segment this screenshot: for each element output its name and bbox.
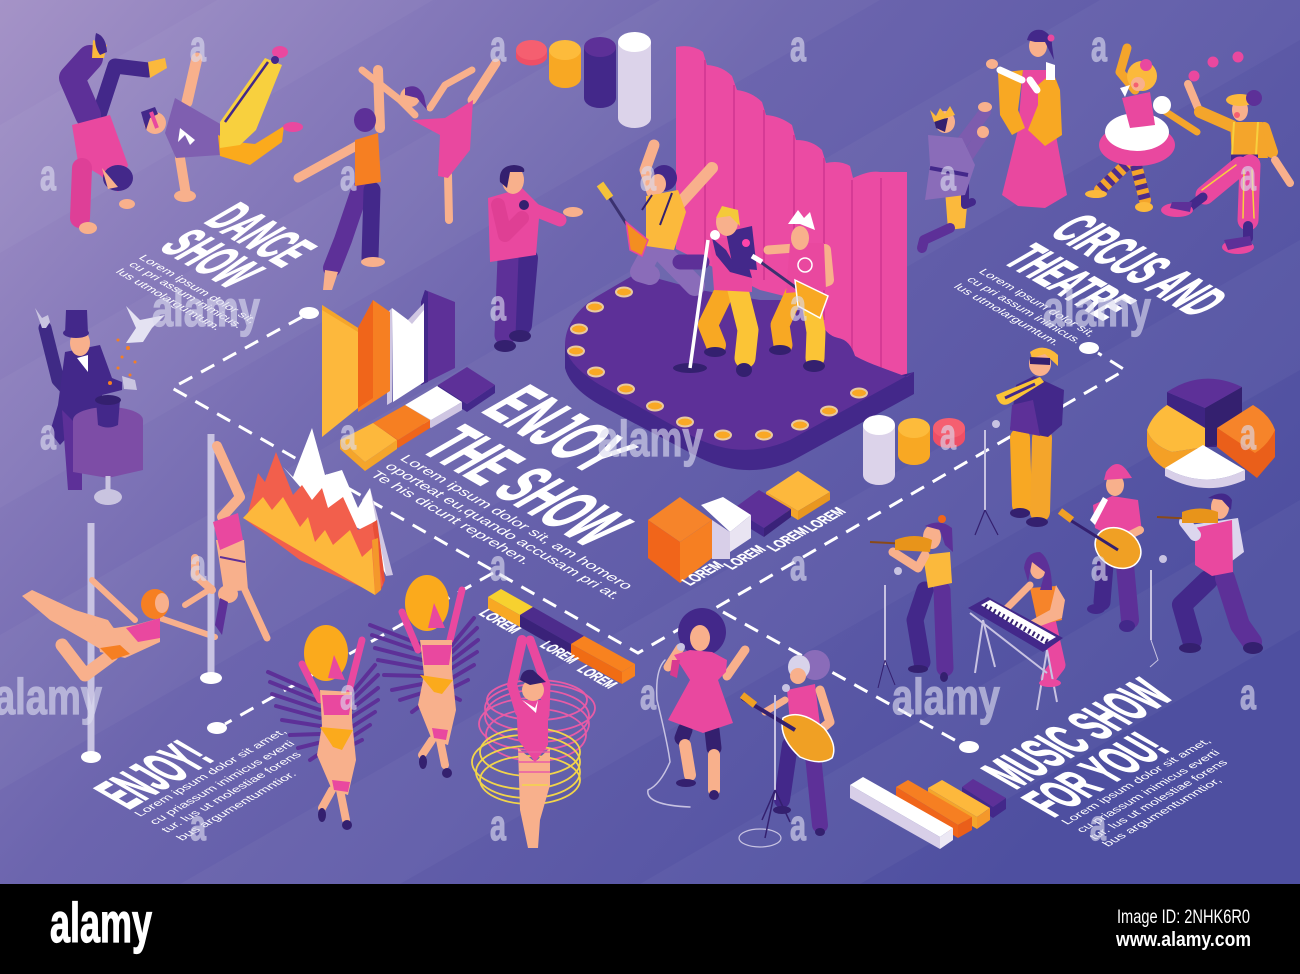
watermark marks: a <box>790 801 806 850</box>
labels: lorem bar: LOREM <box>573 663 620 691</box>
watermark marks: a <box>40 151 56 200</box>
clown with tutu <box>1085 48 1197 212</box>
text block: main lorem: Te his dicunt reprehen. <box>366 469 535 567</box>
breakdancer in pink hoodie <box>72 33 167 234</box>
heading: music show for you <box>968 670 1187 824</box>
dashed connector lines <box>172 317 1125 743</box>
labels: cube chart: LOREM <box>679 559 728 588</box>
watermark logos: alamy <box>598 411 703 467</box>
labels: lorem bar: LOREM <box>536 639 581 666</box>
text block: music show: Lorem ipsum dolor sit amet, <box>1059 737 1214 827</box>
watermark marks: a <box>490 541 506 590</box>
hula hoop dancer <box>472 640 595 848</box>
watermark marks: a <box>490 22 506 71</box>
woman singer in pink dress <box>648 608 745 807</box>
watermark marks: a <box>790 22 806 71</box>
watermark marks: a <box>790 281 806 330</box>
chart: top cylinders <box>516 32 651 128</box>
watermark marks: a <box>190 541 206 590</box>
title: enjoy the show <box>404 375 653 557</box>
labels: cube chart: LOREM <box>721 543 770 572</box>
labels: lorem bar <box>475 607 620 691</box>
labels: cube chart <box>679 505 850 588</box>
watermark marks: a <box>490 281 506 330</box>
footer bar: Image ID: 2NHK6R0 <box>1117 907 1250 928</box>
pole dancer two <box>185 434 267 684</box>
footer bar: alamy <box>50 891 152 954</box>
watermark marks: a <box>190 22 206 71</box>
cylinders: right of stage <box>863 415 965 485</box>
watermark marks: a <box>1240 151 1256 200</box>
band: singer with mic stand <box>673 206 757 377</box>
cubes: bottom center chart <box>648 471 830 583</box>
watermark marks: a <box>1091 541 1107 590</box>
connector dots <box>207 307 1099 753</box>
band: punk bass guitarist <box>752 210 828 372</box>
ballerina <box>362 63 496 220</box>
pole dancer one <box>22 523 215 763</box>
text block: dance show: cu pri assum inimicus. <box>125 260 246 330</box>
labels: cube chart: LOREM <box>764 525 813 554</box>
heading: music show for you: FOR YOU! <box>1009 724 1181 824</box>
male ballet dancer <box>298 70 385 290</box>
text block: music show: tur. lus ut molestiae forens <box>1087 758 1231 842</box>
keyboard player <box>968 552 1065 710</box>
footer bar: www.alamy.com <box>1115 929 1251 951</box>
watermark marks: a <box>1240 410 1256 459</box>
text block: music show: bus argumentumntior, <box>1100 776 1225 849</box>
text block: main lorem: oporteat eu,quando accusam pri at. <box>381 461 625 602</box>
watermark marks: a <box>640 151 656 200</box>
violinist man <box>1150 493 1263 667</box>
carnival dancer right <box>370 575 478 778</box>
watermark logos: alamy <box>152 281 260 337</box>
text block: enjoy: bus argumentumntior. <box>174 770 300 843</box>
magician with top hat and table <box>35 306 165 505</box>
text block: circus and theatre <box>950 267 1098 348</box>
heading: dance show: DANCE <box>192 195 329 275</box>
violinist woman <box>870 515 953 688</box>
text block: music show <box>1059 737 1231 849</box>
text block: music show: cu priassum inimicus everti <box>1074 748 1223 835</box>
watermark marks: a <box>1240 670 1256 719</box>
watermark logos: alamy <box>892 669 1000 725</box>
bars: bottom right steps <box>850 777 1006 849</box>
pie chart <box>1147 379 1275 488</box>
text block: dance show: lus utmolargumtum. <box>112 267 224 332</box>
text block: circus and theatre: Lorem ipsum dolor sit, <box>975 267 1098 339</box>
lady in pink gown <box>986 30 1067 208</box>
stage platform <box>565 273 914 470</box>
watermark marks: a <box>190 801 206 850</box>
title: enjoy the show: ENJOY <box>465 375 653 484</box>
text block: dance show <box>112 253 259 332</box>
text block: main lorem: Lorem ipsum dolor sit, am homero <box>396 453 636 592</box>
heading: enjoy: ENJOY! <box>81 732 227 817</box>
watermark marks: a <box>640 670 656 719</box>
juggling clown <box>1161 52 1290 254</box>
labels: lorem bar: LOREM <box>475 607 524 636</box>
woman with guitar and mic <box>739 650 834 847</box>
chart: mountain area chart <box>243 428 393 595</box>
guitarist with pink hat <box>1060 464 1148 632</box>
heading: dance show <box>147 195 329 296</box>
chart: tall isometric bars <box>322 290 455 437</box>
watermark marks: a <box>340 410 356 459</box>
watermark marks: a <box>790 541 806 590</box>
heading: dance show: SHOW <box>147 221 277 296</box>
king kneeling <box>922 102 992 248</box>
text block: circus and theatre: lus utmolargumtum. <box>950 282 1063 348</box>
band: jumping guitarist <box>600 145 712 286</box>
watermark logos: alamy <box>1043 281 1151 337</box>
watermark marks: a <box>490 801 506 850</box>
text block: enjoy: tur. lus ut molestiae forens <box>159 750 305 835</box>
stage curtain <box>676 46 907 377</box>
heading: circus and theatre: THEATRE <box>992 236 1148 327</box>
text block: enjoy <box>132 727 305 843</box>
text block: dance show: Lorem ipsum dolor sit, <box>135 253 259 325</box>
text block: enjoy: Lorem ipsum dolor sit amet, <box>132 727 290 819</box>
heading: circus and theatre <box>992 206 1242 327</box>
watermark logos <box>0 281 1151 725</box>
carnival dancer left <box>268 625 378 830</box>
stage footlights <box>568 288 867 440</box>
watermark marks <box>40 22 1256 850</box>
watermark marks: a <box>940 151 956 200</box>
trumpet player <box>975 348 1064 535</box>
title: enjoy the show: THE SHOW <box>404 416 648 557</box>
watermark marks: a <box>1090 801 1106 850</box>
labels: cube chart: LOREM <box>801 505 850 534</box>
breakdancer in yellow pants <box>141 46 303 202</box>
text block: circus and theatre: cu pri assum inimicus. <box>963 275 1085 346</box>
watermark marks: a <box>1091 22 1107 71</box>
footer bar <box>0 884 1300 974</box>
watermark marks: a <box>940 410 956 459</box>
watermark marks: a <box>340 670 356 719</box>
chart: flat tiles <box>340 367 495 471</box>
watermark marks: a <box>40 410 56 459</box>
watermark marks: a <box>340 151 356 200</box>
text block: enjoy: cu priassum inimicus everti <box>147 739 298 827</box>
text block: main lorem <box>366 453 636 602</box>
man in pink singing <box>488 165 583 352</box>
bar: three segment lorem bar <box>488 589 635 684</box>
